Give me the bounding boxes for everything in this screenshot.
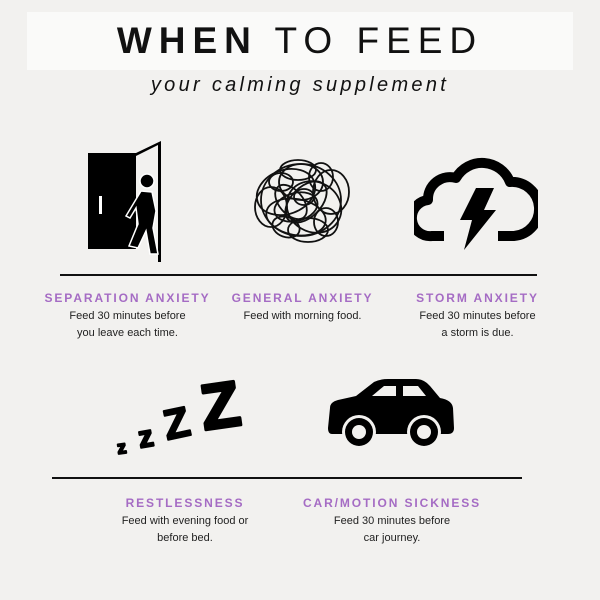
heading: storm anxiety: STORM ANXIETY (416, 291, 539, 305)
title: WHEN TO FEED (117, 20, 483, 61)
text: car/motion sickness: car journey. (364, 532, 420, 544)
heading: separation anxiety: SEPARATION ANXIETY (44, 291, 210, 305)
text: restlessness: Feed with evening food or (122, 515, 248, 527)
icon: tangled scribble (254, 159, 350, 243)
text: storm anxiety: a storm is due. (441, 327, 514, 339)
icon: zzz (116, 372, 245, 458)
panel: restlessness (122, 496, 248, 544)
panel: separation anxiety (44, 291, 210, 339)
heading: restlessness: RESTLESSNESS (126, 496, 244, 510)
icon: zzz: Z (159, 397, 194, 449)
divider row 2 (52, 477, 522, 479)
icon: storm cloud (414, 158, 538, 250)
text: general anxiety: Feed with morning food. (243, 310, 362, 322)
panel: general anxiety (232, 291, 373, 322)
text: separation anxiety: Feed 30 minutes before (69, 310, 186, 322)
text: restlessness: before bed. (157, 532, 213, 544)
subtitle: your calming supplement (151, 74, 449, 96)
text: storm anxiety (419, 310, 536, 339)
icon: door with person (88, 141, 161, 262)
text: separation anxiety: you leave each time. (77, 327, 178, 339)
divider row 1 (60, 274, 537, 276)
text: separation anxiety (69, 310, 186, 339)
text: car/motion sickness: Feed 30 minutes before (334, 515, 450, 527)
panel: car/motion sickness (303, 496, 481, 544)
panel: storm anxiety (416, 291, 539, 339)
text: restlessness (122, 515, 248, 544)
icon: zzz: z (135, 420, 156, 455)
heading: general anxiety: GENERAL ANXIETY (232, 291, 373, 305)
icon: zzz: z (116, 437, 127, 458)
text: storm anxiety: Feed 30 minutes before (419, 310, 536, 322)
icon: car (328, 379, 454, 446)
title banner (27, 12, 573, 70)
heading: car/motion sickness: CAR/MOTION SICKNESS (303, 496, 481, 510)
text: car/motion sickness (334, 515, 450, 544)
